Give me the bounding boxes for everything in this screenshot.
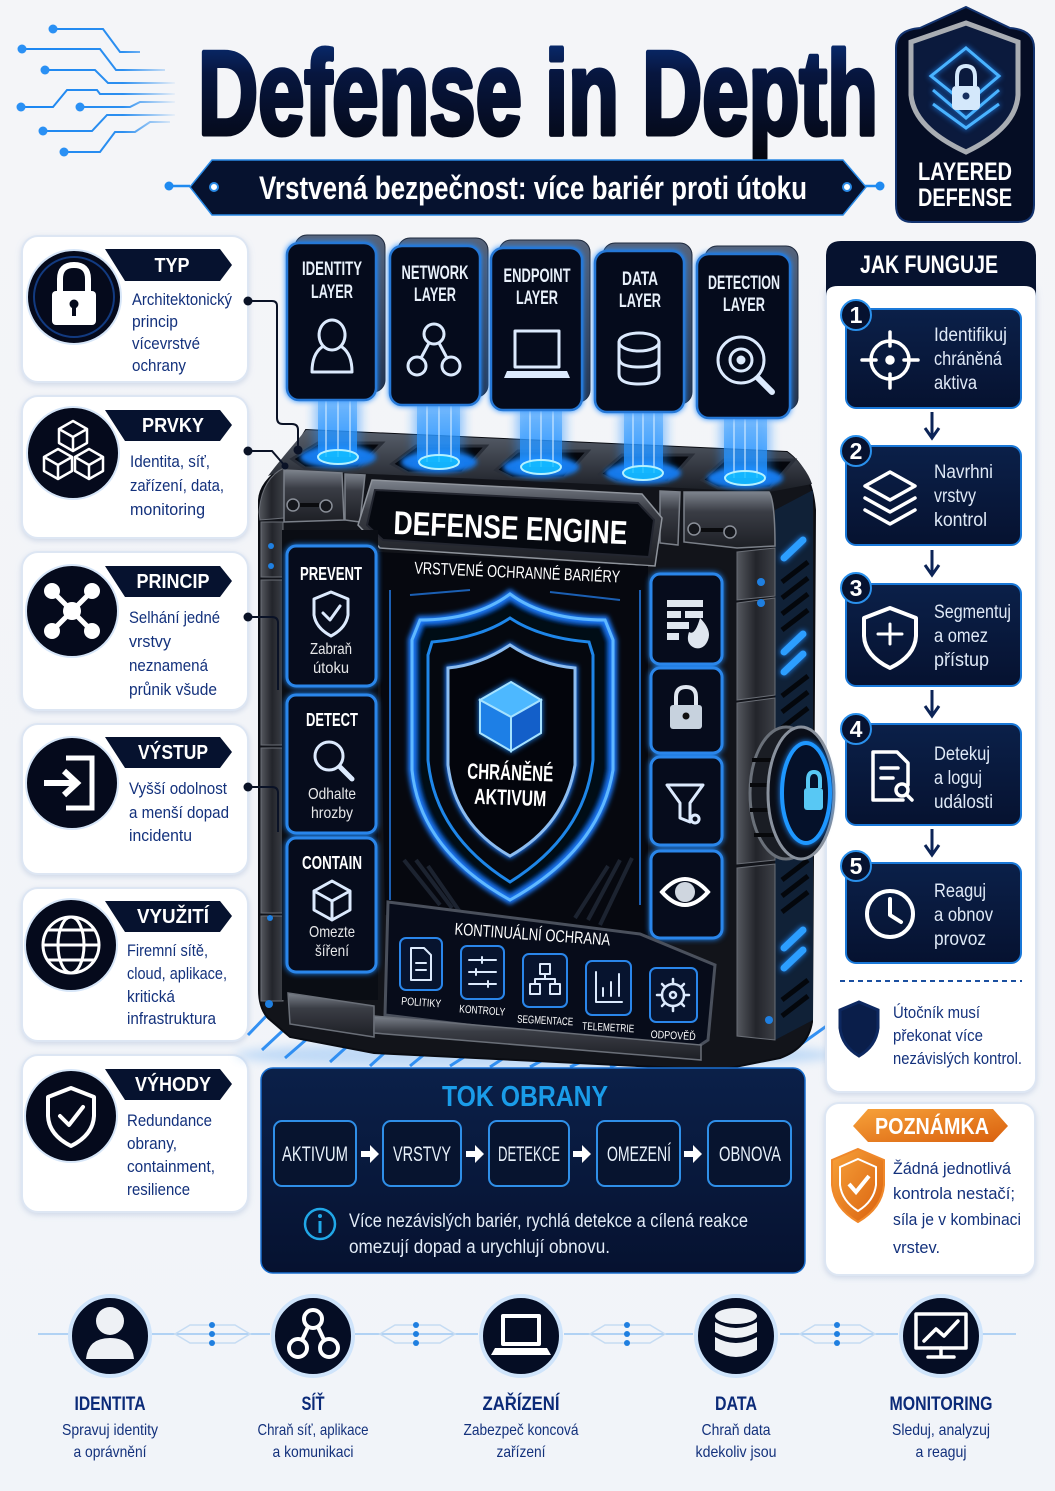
icon: funnel — [667, 785, 703, 823]
top face — [268, 430, 812, 492]
sockets — [292, 443, 794, 488]
panel: JAK FUNGUJE: JAK FUNGUJE — [860, 251, 998, 279]
panel: VYUŽITÍ: infrastruktura — [127, 1009, 216, 1028]
icon: padlock — [670, 687, 702, 729]
panel: PREVENT — [287, 546, 376, 686]
panel: TYP: vícevrstvé — [132, 334, 200, 353]
panel: continuous protection — [385, 902, 715, 1052]
icon: cube — [480, 682, 541, 751]
icon: orange shield — [832, 1149, 884, 1222]
body — [259, 430, 815, 1070]
nameplate — [358, 480, 662, 566]
icon: globe — [43, 917, 99, 973]
panel: continuous protection: KONTINUÁLNÍ OCHRANA — [454, 920, 611, 949]
arrow — [925, 550, 939, 575]
flow boxes: OMEZENÍ — [607, 1143, 671, 1166]
panel: CONTAIN: CONTAIN — [302, 853, 362, 873]
panel: VÝSTUP: Vyšší odolnost — [129, 779, 227, 798]
panel: TOK OBRANY: omezují dopad a urychlují obnovu. — [349, 1237, 610, 1258]
defense engine machine — [235, 400, 835, 1070]
step 1 — [841, 300, 1021, 408]
badge: layered defense — [896, 7, 1034, 222]
panel: PRINCIP: neznamená — [129, 656, 208, 675]
icon: shield — [840, 1002, 878, 1056]
panel: PREVENT: PREVENT — [300, 564, 362, 584]
pillar: síť: SÍŤ — [302, 1393, 325, 1415]
inner dark panel — [378, 552, 648, 950]
panel: VÝHODY: resilience — [127, 1180, 190, 1199]
step 1: aktiva — [934, 373, 977, 394]
icon: info — [305, 1209, 335, 1239]
panel: DETECT: Odhalte — [308, 786, 356, 803]
panel: DETECT — [287, 695, 376, 833]
step 5 — [841, 851, 1021, 963]
panel: VYUŽITÍ: Firemní sítě, — [127, 941, 208, 960]
arrow — [925, 412, 939, 438]
step 1: Identifikuj — [934, 325, 1007, 346]
panel: VÝSTUP: a menší dopad — [129, 803, 229, 822]
flow boxes — [274, 1121, 791, 1186]
layer card: network: LAYER — [414, 285, 456, 306]
step 2: 2 — [850, 438, 862, 464]
beams — [314, 400, 771, 478]
panel: VÝSTUP — [22, 724, 248, 874]
subtitle banner — [164, 160, 884, 215]
panel: VÝHODY: obrany, — [127, 1134, 177, 1153]
panel: DETECT: DETECT — [306, 710, 358, 730]
pillar: monitoring — [890, 1296, 992, 1461]
right metal column — [737, 548, 775, 1040]
dial lock — [750, 727, 834, 859]
badge: layered defense: DEFENSE — [918, 184, 1012, 212]
panel: POZNÁMKA: kontrola nestačí; — [893, 1184, 1015, 1203]
panel: PRVKY: monitoring — [130, 500, 205, 519]
panel: VYUŽITÍ: VYUŽITÍ — [137, 904, 209, 928]
step 3: přístup — [934, 650, 989, 671]
pillar: data: kdekoliv jsou — [696, 1444, 776, 1461]
panel: TOK OBRANY — [261, 1068, 805, 1273]
step 5: Reaguj — [934, 881, 986, 902]
socket glow — [300, 446, 783, 489]
arrow — [925, 690, 939, 716]
bottom rail — [288, 993, 701, 1060]
step 1: 1 — [850, 302, 863, 328]
step 2: vrstvy — [934, 486, 976, 507]
pillar: data: Chraň data — [702, 1422, 771, 1439]
badge: layered defense: LAYERED — [918, 158, 1012, 186]
icon: eye — [662, 879, 708, 905]
panel: VÝHODY: containment, — [127, 1157, 215, 1176]
flow boxes: AKTIVUM — [282, 1143, 348, 1166]
icon: lock — [52, 265, 96, 325]
pillar: zařízení: zařízení — [496, 1444, 546, 1461]
icon: shield check — [48, 1088, 94, 1146]
panel: PRVKY: zařízení, data, — [130, 476, 224, 495]
circuit decoration — [16, 24, 175, 156]
panel: VÝHODY — [22, 1055, 248, 1212]
text: note: překonat více — [893, 1027, 983, 1045]
connectors — [244, 296, 302, 832]
central shield: CHRÁNĚNÉ — [467, 759, 554, 786]
panel: POZNÁMKA: POZNÁMKA — [875, 1112, 989, 1139]
pillar: zařízení: Zabezpeč koncová — [464, 1422, 579, 1439]
layer card: detection: DETECTION — [708, 273, 780, 294]
panel: TYP: ochrany — [132, 356, 186, 375]
flow boxes: DETEKCE — [498, 1143, 560, 1166]
panel: continuous protection: ODPOVĚĎ — [650, 1028, 696, 1043]
subtitle banner: Vrstvená bezpečnost: více bariér proti útoku — [259, 170, 807, 206]
right vents — [775, 490, 813, 1040]
step 3: a omez — [934, 626, 988, 647]
step 5: 5 — [850, 853, 863, 879]
layer card: data: DATA — [622, 269, 658, 290]
panel: CONTAIN: šíření — [315, 943, 349, 960]
heading: barriers: VRSTVENÉ OCHRANNÉ BARIÉRY — [414, 559, 621, 586]
step 3: Segmentuj — [934, 602, 1011, 623]
icon: sliders — [469, 957, 496, 987]
pillar: identita: Spravuj identity — [62, 1422, 158, 1439]
panel: PREVENT: Zabraň — [310, 641, 352, 658]
pillar: data: DATA — [715, 1394, 757, 1415]
panel: VYUŽITÍ — [22, 888, 248, 1041]
pillar: monitoring: Sleduj, analyzuj — [892, 1422, 990, 1439]
layer card: endpoint: ENDPOINT — [504, 266, 571, 287]
nameplate: DEFENSE ENGINE — [393, 504, 628, 551]
panel: POZNÁMKA: Žádná jednotlivá — [893, 1159, 1012, 1178]
step 2 — [841, 436, 1021, 545]
top metal blocks — [284, 470, 775, 548]
central shield — [412, 594, 613, 900]
flow boxes: VRSTVY — [393, 1143, 451, 1166]
flow boxes: OBNOVA — [719, 1143, 781, 1166]
icon: policy document — [411, 948, 431, 980]
layer card: detection: LAYER — [723, 295, 765, 316]
step 4: a loguj — [934, 768, 982, 789]
layer card: network — [390, 238, 488, 405]
panel: PRVKY: Identita, síť, — [130, 452, 210, 471]
panel: VÝSTUP: VÝSTUP — [138, 740, 208, 764]
step 3: 3 — [850, 575, 862, 601]
panel: PRVKY — [22, 396, 248, 538]
panel: TOK OBRANY: TOK OBRANY — [442, 1081, 608, 1113]
panel: POZNÁMKA — [825, 1103, 1035, 1275]
layer card: identity — [287, 235, 385, 400]
panel: VYUŽITÍ: cloud, aplikace, — [127, 964, 227, 983]
circuit traces — [404, 858, 632, 925]
panel: VÝHODY: VÝHODY — [135, 1072, 212, 1096]
icon: telemetry — [596, 972, 622, 1002]
panel: continuous protection: TELEMETRIE — [582, 1021, 634, 1035]
panel: TOK OBRANY: Více nezávislých bariér, rychlá detekce a cílená reakce — [349, 1211, 748, 1232]
panel: PRINCIP: PRINCIP — [136, 571, 210, 593]
step 4: Detekuj — [934, 744, 990, 765]
layer card: endpoint — [491, 240, 590, 410]
text: note: nezávislých kontrol. — [893, 1050, 1022, 1068]
pillar: monitoring: MONITORING — [890, 1394, 992, 1415]
step 2: kontrol — [934, 510, 987, 531]
pillar: data — [696, 1296, 776, 1461]
panel: TYP: princip — [132, 312, 178, 331]
left metal column — [259, 468, 284, 1001]
panel: continuous protection: KONTROLY — [459, 1003, 506, 1019]
panel: TYP — [22, 236, 248, 382]
pillar: síť — [258, 1296, 369, 1461]
central shield: AKTIVUM — [474, 784, 547, 811]
text: note: Útočník musí — [893, 1003, 980, 1022]
pillar: síť: a komunikaci — [272, 1444, 354, 1461]
panel: DETECT: hrozby — [311, 805, 353, 822]
layer card: identity: LAYER — [311, 282, 353, 303]
step 1: chráněná — [934, 349, 1002, 370]
panel: continuous protection: SEGMENTACE — [517, 1014, 573, 1028]
pillar: identita: IDENTITA — [74, 1394, 146, 1415]
panel: POZNÁMKA: síla je v kombinaci — [893, 1210, 1021, 1229]
layer card: endpoint: LAYER — [516, 288, 558, 309]
panel: JAK FUNGUJE — [826, 241, 1036, 1092]
layer card: identity: IDENTITY — [302, 259, 362, 280]
pillar: zařízení: ZAŘÍZENÍ — [482, 1393, 560, 1415]
panel: VÝHODY: Redundance — [127, 1111, 212, 1130]
layer card: data: LAYER — [619, 291, 661, 312]
panel: PREVENT: útoku — [313, 660, 349, 677]
panel: TYP: TYP — [154, 255, 190, 277]
step 2: Navrhni — [934, 462, 993, 483]
pillar: identita — [62, 1296, 158, 1461]
step 5: provoz — [934, 929, 986, 950]
layer card: data — [595, 243, 692, 412]
arrow — [925, 829, 939, 855]
icon: firewall — [667, 600, 709, 648]
panel: PRVKY: PRVKY — [142, 415, 205, 437]
text: note — [893, 1003, 1022, 1068]
panel: PRINCIP: vrstvy — [129, 632, 171, 651]
icon: exit arrow — [44, 758, 92, 808]
panel: POZNÁMKA: vrstev. — [893, 1238, 940, 1257]
step 5: a obnov — [934, 905, 993, 926]
pillar: monitoring: a reaguj — [916, 1444, 966, 1461]
flow arrows — [361, 1145, 702, 1163]
panel: CONTAIN — [287, 838, 376, 972]
step 3 — [841, 573, 1021, 686]
layer card: network: NETWORK — [402, 263, 469, 284]
icon: gear — [657, 979, 689, 1011]
panel: PRINCIP — [22, 552, 248, 710]
layer card: detection — [697, 246, 798, 418]
panel: TYP: Architektonický — [132, 290, 232, 309]
icon: segmentation — [530, 964, 560, 994]
step 4: události — [934, 792, 993, 813]
pillar: síť: Chraň síť, aplikace — [258, 1422, 369, 1439]
step 4 — [841, 714, 1021, 825]
panel: VYUŽITÍ: kritická — [127, 987, 175, 1006]
icon: cubes — [44, 421, 103, 479]
step 4: 4 — [850, 716, 863, 742]
panel: VÝSTUP: incidentu — [129, 826, 192, 845]
panel: PRINCIP: průnik všude — [129, 680, 217, 699]
panel: continuous protection: POLITIKY — [401, 996, 442, 1010]
panel: right icons — [651, 574, 722, 938]
floor glow — [248, 1010, 828, 1067]
panel: CONTAIN: Omezte — [309, 924, 355, 941]
icon: network — [44, 583, 100, 639]
bottom connectors — [38, 1322, 1016, 1346]
panel: PRINCIP: Selhání jedné — [129, 608, 220, 627]
pillar: zařízení — [464, 1296, 579, 1461]
pillar: identita: a oprávnění — [74, 1444, 147, 1461]
